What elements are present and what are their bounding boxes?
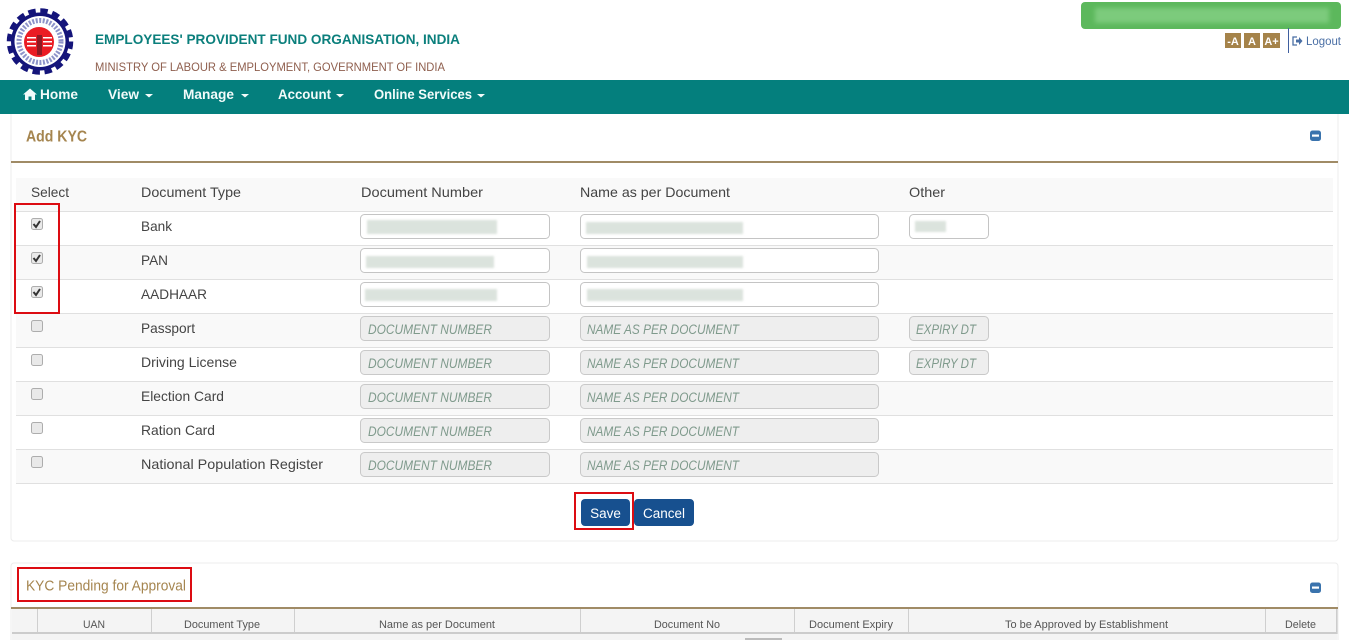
table header: Select	[31, 184, 69, 200]
heading rule	[11, 607, 1338, 609]
row: Passport: EXPIRY DT	[916, 322, 977, 337]
row: Election Card: Election Card	[141, 388, 224, 404]
table header: Other	[909, 184, 945, 200]
icon: EPFO logo	[9, 10, 71, 72]
row: Bank: Bank	[141, 218, 173, 234]
row: National Population Register: National Population Register	[141, 456, 323, 472]
row: Passport: Passport	[141, 320, 195, 336]
table header labels: Document Type	[184, 619, 260, 631]
heading: KYC Pending for Approval: KYC Pending for Approval	[26, 578, 186, 594]
row: Passport: DOCUMENT NUMBER	[368, 322, 492, 337]
button: Save: Save	[590, 506, 621, 521]
row: Ration Card: Ration Card	[141, 422, 215, 438]
heading rule	[11, 161, 1338, 163]
font size controls: A+	[1264, 36, 1279, 48]
table header: Document Number	[361, 184, 483, 200]
icon: collapse	[1310, 130, 1321, 141]
panel: Add KYC	[11, 114, 1338, 541]
table header: Name as per Document	[580, 184, 730, 200]
navigation bar	[0, 80, 1349, 114]
row: Election Card: NAME AS PER DOCUMENT	[587, 390, 741, 405]
row: Ration Card: NAME AS PER DOCUMENT	[587, 424, 741, 439]
row: Driving License	[32, 350, 988, 374]
button: Save	[581, 499, 630, 526]
row: Driving License: NAME AS PER DOCUMENT	[587, 356, 741, 371]
row: National Population Register	[32, 452, 878, 476]
callout: pending heading highlight	[18, 568, 191, 601]
button: Cancel	[634, 499, 694, 526]
row: AADHAAR	[32, 282, 878, 306]
table header: Document Type	[141, 184, 241, 200]
icon: home	[23, 88, 37, 100]
menu: Manage: Manage	[183, 86, 234, 102]
heading: Add KYC: Add KYC	[26, 128, 87, 146]
table: KYC documents	[16, 178, 1333, 484]
table header labels: Delete	[1285, 619, 1316, 631]
row: Ration Card	[32, 418, 878, 442]
table header labels	[83, 619, 1316, 631]
row: Passport	[32, 316, 988, 340]
user name badge (blurred)	[1081, 2, 1341, 29]
menu: View: View	[108, 86, 139, 102]
menu: Home: Home	[40, 86, 78, 102]
row: PAN: PAN	[141, 252, 168, 268]
row: Passport: NAME AS PER DOCUMENT	[587, 322, 741, 337]
menu: Online Services: Online Services	[374, 86, 472, 102]
row: Ration Card: DOCUMENT NUMBER	[368, 424, 492, 439]
font size controls	[1225, 33, 1280, 48]
title: organisation name: EMPLOYEES' PROVIDENT FUND ORGANISATION, INDIA	[95, 31, 460, 47]
logout link: Logout	[1306, 36, 1342, 48]
menu: Account: Account	[278, 86, 331, 102]
table header labels: Document No	[654, 619, 720, 631]
row: National Population Register: NAME AS PER DOCUMENT	[587, 458, 741, 473]
logout link	[1288, 28, 1342, 53]
table header	[31, 184, 945, 200]
row: Election Card: DOCUMENT NUMBER	[368, 390, 492, 405]
row: Driving License: Driving License	[141, 354, 237, 370]
table: pending approvals	[12, 609, 1338, 640]
row: Driving License: DOCUMENT NUMBER	[368, 356, 492, 371]
subtitle: ministry name: MINISTRY OF LABOUR & EMPLOYMENT, GOVERNMENT OF INDIA	[95, 60, 445, 74]
table header labels: UAN	[83, 619, 105, 631]
row: Driving License: EXPIRY DT	[916, 356, 977, 371]
row: Bank	[32, 214, 988, 238]
font size controls: A	[1248, 36, 1256, 48]
font size controls: -A	[1227, 36, 1239, 48]
table header labels: Name as per Document	[379, 619, 495, 631]
callout: save highlight	[575, 493, 633, 529]
table header labels: Document Expiry	[809, 619, 893, 631]
panel: KYC Pending for Approval	[11, 563, 1338, 640]
row: Election Card	[32, 384, 878, 408]
icon: collapse	[1310, 582, 1321, 593]
row: AADHAAR: AADHAAR	[141, 286, 207, 302]
callout: checkbox highlight	[15, 204, 59, 313]
row: PAN	[32, 248, 878, 272]
table header labels: To be Approved by Establishment	[1005, 619, 1168, 631]
button: Cancel: Cancel	[643, 506, 685, 521]
row: National Population Register: DOCUMENT NUMBER	[368, 458, 492, 473]
